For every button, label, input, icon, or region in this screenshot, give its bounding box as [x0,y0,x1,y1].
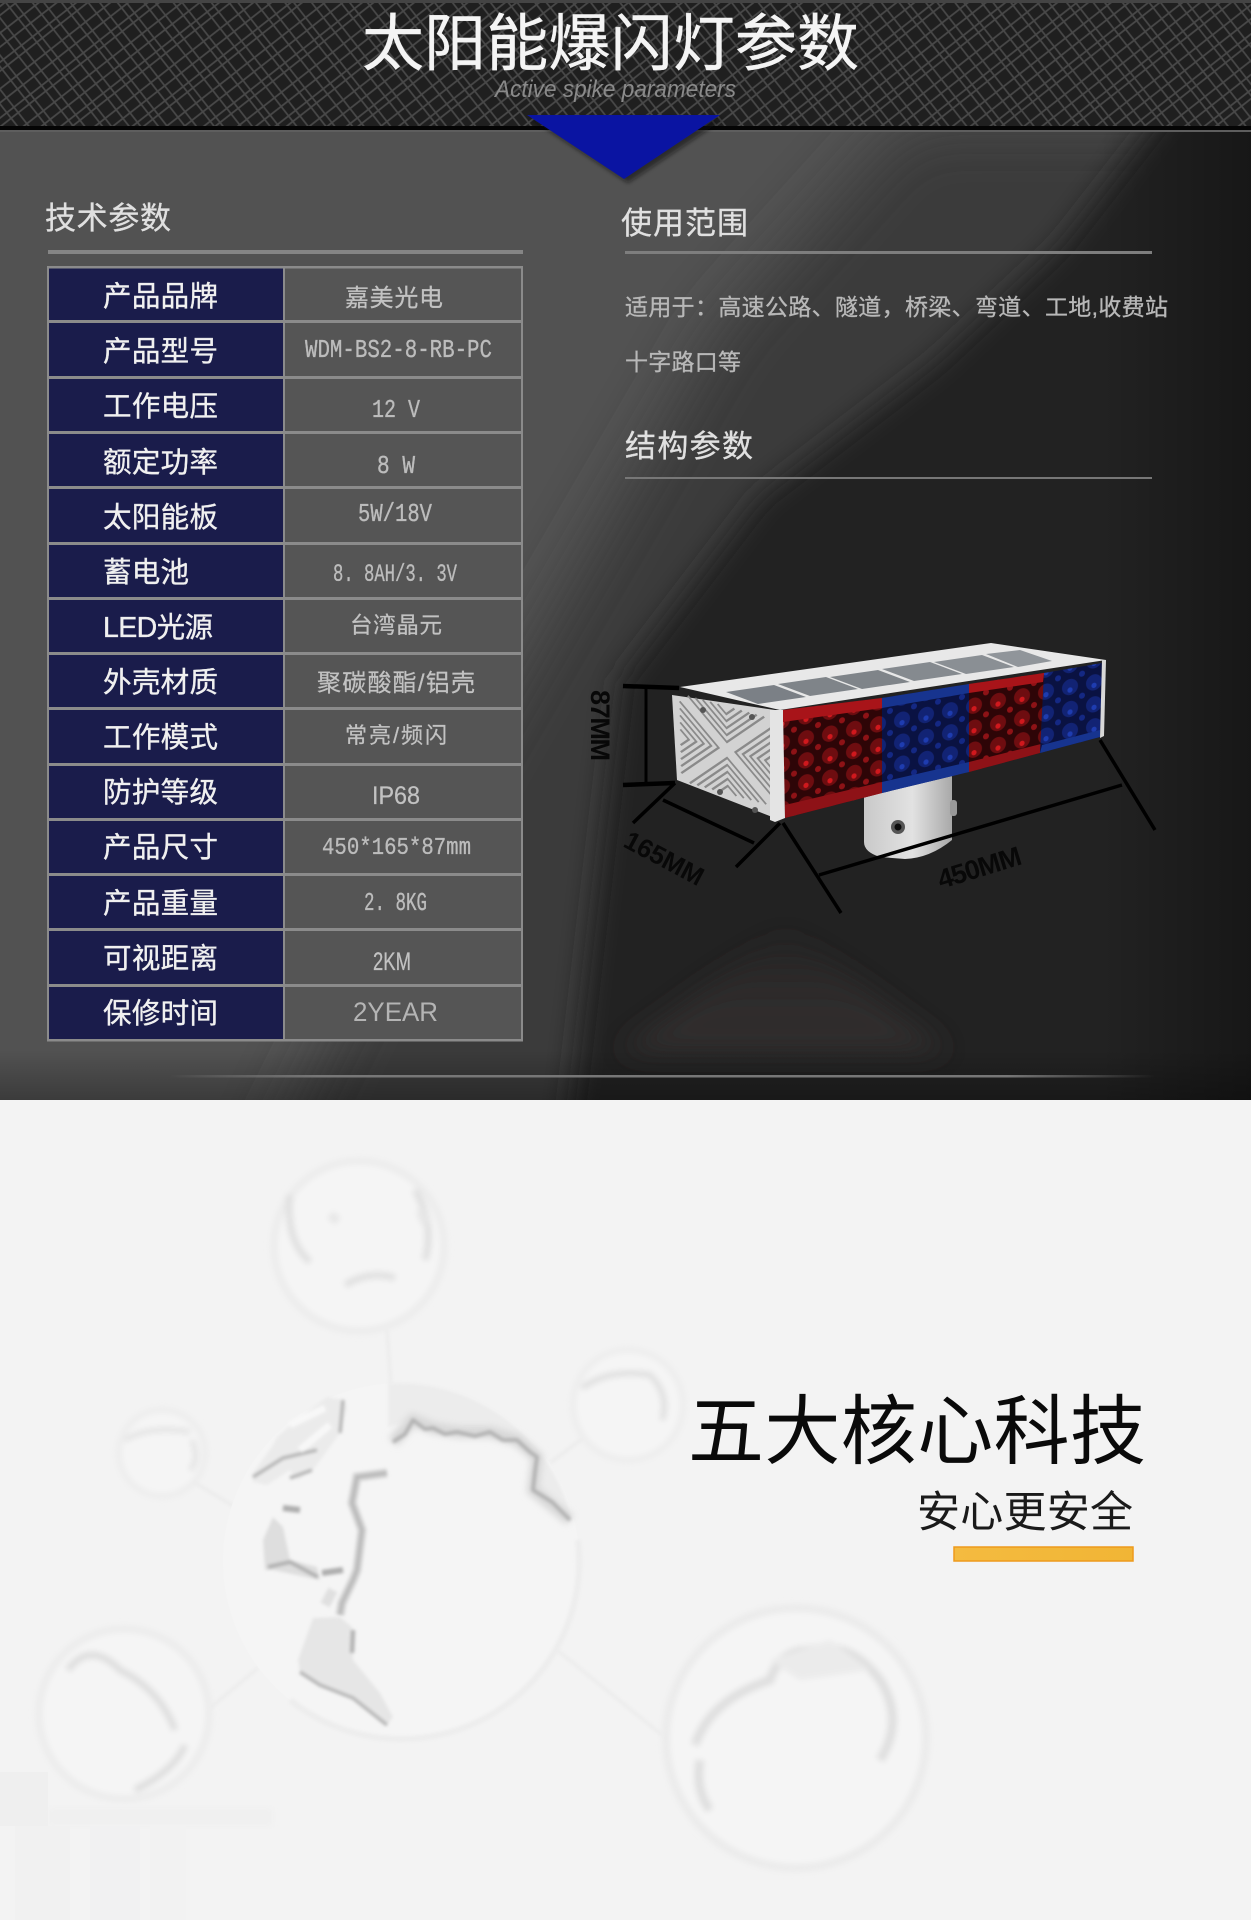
row: LED source: LED光源 [103,612,213,644]
row: weight: 产品重量 [103,888,218,920]
row: warranty: 2YEAR [353,997,438,1027]
subtitle: Active spike parameters [493,76,736,103]
row: model [103,335,492,368]
LED panel blue left [882,684,969,793]
row: warranty [103,997,438,1030]
light technology section background [0,1100,1251,1920]
row: model: WDM-BS2-8-RB-PC [305,335,492,365]
faint bottom-left artifact [0,1772,273,1920]
globe: left small [119,1410,205,1496]
label 450MM: 450MM [934,841,1025,895]
title: 太阳能爆闪灯参数 [362,10,859,79]
row: visible distance [103,943,411,976]
LED panel red right [969,673,1044,772]
arctic landmass [253,1397,347,1485]
South America [298,1617,393,1725]
globe: centre with Americas [223,1383,579,1739]
globe disc [223,1383,579,1739]
row: protection grade [103,777,420,810]
row: voltage: 工作电压 [103,391,218,423]
row: battery [103,557,457,589]
northern cap [388,1383,572,1520]
row: housing material [103,667,475,699]
row: power: 8 W [377,451,415,481]
row: model: 产品型号 [103,336,218,368]
row: visible distance: 可视距离 [103,943,218,975]
label 87MM: 87MM [585,690,615,761]
usage text: 十字路口等 [625,349,741,375]
row: battery: 8. 8AH/3. 3V [333,560,457,589]
table navy label column [49,268,283,1040]
row: solar panel [103,499,432,534]
row: protection grade: 防护等级 [103,777,218,809]
row: battery: 蓄电池 [103,557,189,589]
row: LED source: 台湾晶元 [350,613,442,638]
table grid lines [47,266,523,1042]
heading: usage scope: 使用范围 [621,206,748,241]
heading: technical parameters: 技术参数 [45,201,171,236]
globe: bottom left [39,1629,209,1799]
row: brand: 嘉美光电 [345,285,443,312]
heading: five core technologies: 五大核心科技 [688,1390,1146,1475]
North America coasts [263,1473,387,1615]
length dimension 450MM [783,740,1155,913]
northern coast shading [393,1420,570,1520]
structure rule [625,477,1152,479]
width dimension 165MM [633,783,780,867]
right edge trim [1100,660,1106,738]
LED panel red left [783,698,882,818]
end cap with embossed chevrons [672,694,785,822]
specification table [47,266,523,1042]
row: weight [103,888,427,920]
orange accent bar [954,1547,1133,1561]
top solar face [680,643,1106,710]
LED panel blue right [1040,663,1102,753]
row: power [103,447,415,481]
usage text [625,294,1168,375]
mounting post [864,770,957,859]
row: housing material: 聚碳酸酯/铝壳 [317,670,475,697]
row: power: 额定功率 [103,447,218,479]
row: dimensions [103,832,471,864]
row: housing material: 外壳材质 [103,667,218,699]
row: weight: 2. 8KG [364,888,427,918]
globe: top [274,1161,444,1331]
heading rule [48,250,523,254]
row: protection grade: IP68 [372,782,420,810]
row: voltage: 12 V [372,395,420,425]
globe: right small [573,1350,683,1460]
row: dimensions: 产品尺寸 [103,832,218,864]
row: working mode: 常亮/频闪 [345,723,447,748]
header band with plaid texture [0,0,1251,132]
row: working mode [103,722,447,754]
row: solar panel: 太阳能板 [103,502,218,534]
row: visible distance: 2KM [373,948,411,976]
usage text: 适用于：高速公路、隧道，桥梁、弯道、工地,收费站 [625,294,1168,320]
globe rim, lower right [290,1540,579,1739]
northern coast soft shadow [393,1420,570,1520]
row: dimensions: 450*165*87mm [322,835,471,862]
bottom divider of dark section [170,1075,1155,1078]
row: brand [103,281,443,313]
row: voltage [103,391,420,425]
row: brand: 产品品牌 [103,281,218,313]
row: LED source [103,612,442,644]
label 165MM: 165MM [619,825,709,892]
row: solar panel: 5W/18V [358,499,432,529]
usage rule [625,251,1152,254]
subheading: safe and safer: 安心更安全 [917,1489,1133,1537]
row: warranty: 保修时间 [103,998,218,1030]
connector lines [187,1330,662,1735]
molecule of globes watermark [39,1161,926,1868]
dark parameters section background [0,0,1251,1200]
table value column [285,268,521,1040]
blue downward triangle marker [527,115,724,183]
height dimension 87MM [623,686,679,785]
heading: structure parameters: 结构参数 [625,429,753,464]
product illustration: solar strobe light [585,643,1155,913]
globe: bottom right [666,1608,926,1868]
row: working mode: 工作模式 [103,722,218,754]
